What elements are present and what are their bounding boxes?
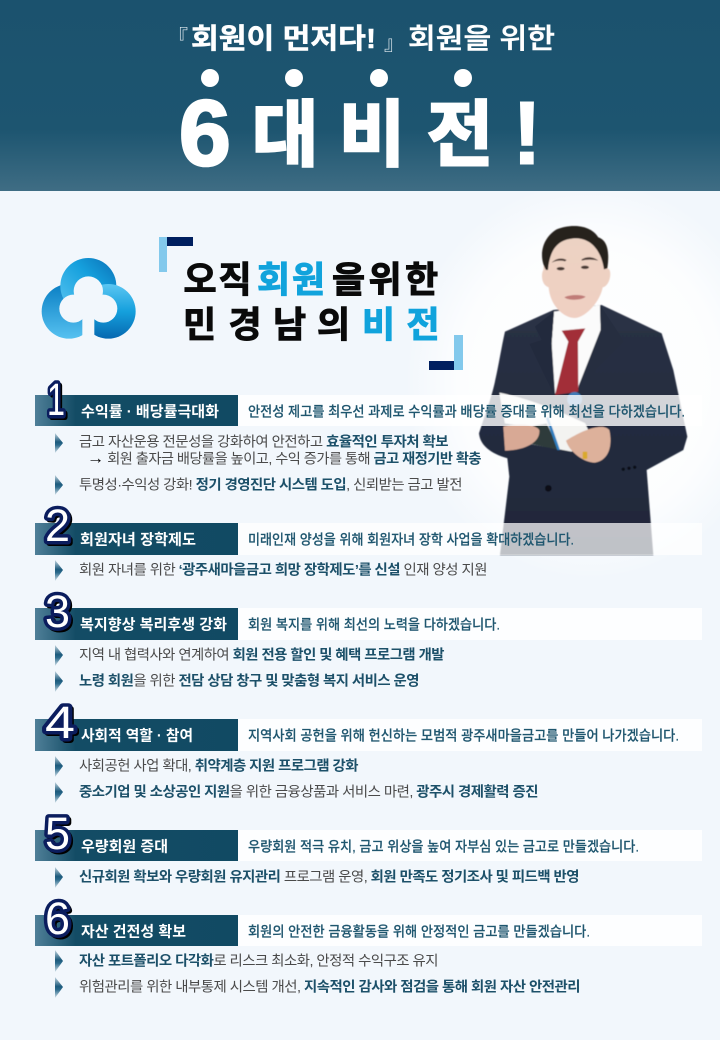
number 2: 2 bbox=[45, 500, 70, 551]
section 5 label: 우량회원 증대 bbox=[81, 838, 168, 856]
banner subtitle: 회원을 위한 bbox=[408, 23, 555, 54]
number 4: 4 bbox=[45, 697, 75, 748]
bullet icon bbox=[55, 756, 63, 777]
tie bbox=[555, 328, 585, 395]
section 3 bars bbox=[35, 608, 702, 640]
section 3 point 2: 노령 회원을 위한 전담 상담 창구 및 맞춤형 복지 서비스 운영 bbox=[79, 672, 419, 688]
banner title: 비 bbox=[339, 96, 405, 176]
section 5 bars bbox=[35, 830, 702, 861]
heading bracket bottom bbox=[429, 335, 463, 370]
section 4 bbox=[35, 697, 702, 803]
heading text: 오직 bbox=[184, 259, 252, 300]
section 2 statement: 미래인재 양성을 위해 회원자녀 장학 사업을 확대하겠습니다. bbox=[248, 532, 574, 548]
section 6 statement: 회원의 안전한 금융활동을 위해 안정적인 금고를 만들겠습니다. bbox=[248, 924, 590, 940]
section 4 point 2: 중소기업 및 소상공인 지원 을 위한 금융상품과 서비스 마련, 광주시 경제활력 증진 bbox=[79, 784, 538, 800]
heading bracket top bbox=[159, 237, 193, 272]
section 4 bars bbox=[35, 719, 702, 751]
section 5 statement: 우량회원 적극 유치, 금고 위상을 높여 자부심 있는 금고로 만들겠습니다. bbox=[248, 838, 639, 854]
banner title: 6 bbox=[179, 81, 231, 185]
bullet icon bbox=[55, 950, 63, 972]
vision heading bbox=[159, 237, 463, 370]
bullet icon bbox=[55, 560, 63, 581]
number 5: 5 bbox=[45, 808, 70, 859]
bullet icon bbox=[55, 977, 63, 998]
section 6 point 2: 위험관리를 위한 내부통제 시스템 개선, 지속적인 감사와 점검을 통해 회원 자산 안전관리 bbox=[79, 978, 580, 994]
number 3: 3 bbox=[45, 586, 70, 637]
section 2 bars bbox=[35, 523, 702, 555]
section 2 label: 회원자녀 장학제도 bbox=[80, 532, 196, 548]
section 3 bbox=[35, 586, 702, 692]
section 1 bbox=[35, 374, 702, 495]
section 1 point 1: 금고 자산운용 전문성을 강화하여 안전하고 효율적인 투자처 확보 bbox=[79, 434, 449, 450]
section 6 label: 자산 건전성 확보 bbox=[81, 924, 186, 940]
ring bbox=[583, 452, 587, 459]
section 4 point 1: 사회공헌 사업 확대, 취약계층 지원 프로그램 강화 bbox=[79, 758, 359, 774]
number 4: 4 bbox=[47, 699, 77, 750]
portrait glow bbox=[405, 180, 720, 580]
bullet icon bbox=[55, 867, 63, 888]
heading text: 을위한 bbox=[332, 259, 438, 300]
section 1 statement: 안전성 제고를 최우선 과제로 수익률과 배당률 증대를 위해 최선을 다하겠습니다. bbox=[248, 404, 685, 420]
section 4 statement: 지역사회 공헌을 위해 헌신하는 모범적 광주새마을금고를 만들어 나가겠습니다. bbox=[248, 728, 679, 744]
bullet icon bbox=[55, 782, 63, 803]
sleeve buttons and jacket button bbox=[545, 466, 636, 492]
banner title: ! bbox=[512, 84, 542, 184]
heading text: 회원 bbox=[257, 259, 325, 300]
bullet icon bbox=[55, 433, 63, 453]
lapels bbox=[529, 312, 554, 393]
banner subtitle: 『 bbox=[168, 26, 188, 49]
shirt bbox=[552, 305, 601, 393]
section 6 bbox=[35, 893, 702, 998]
neck and face bbox=[542, 238, 610, 318]
section 1 point 2: 투명성·수익성 강화! 정기 경영진단 시스템 도입 , 신뢰받는 금고 발전 bbox=[79, 476, 462, 492]
section 3 statement: 회원 복지를 위해 최선의 노력을 다하겠습니다. bbox=[248, 616, 500, 632]
lapel pin bbox=[567, 392, 582, 407]
hair bbox=[542, 226, 608, 270]
section 5 point 1: 신규회원 확보와 우량회원 유지관리 프로그램 운영, 회원 만족도 정기조사 및 피드백 반영 bbox=[79, 868, 579, 884]
section 4 label: 사회적 역할 · 참여 bbox=[81, 728, 193, 744]
banner subtitle bbox=[168, 23, 555, 55]
number 6: 6 bbox=[47, 895, 72, 946]
section 3 label: 복지향상 복리후생 강화 bbox=[80, 616, 227, 634]
banner subtitle: 』 bbox=[384, 33, 404, 55]
portrait of man in suit holding a booklet bbox=[479, 226, 687, 555]
banner subtitle: 회원이 먼저다! bbox=[191, 23, 376, 54]
section 6 point 1: 자산 포트폴리오 다각화 로 리스크 최소화, 안정적 수익구조 유지 bbox=[79, 952, 438, 968]
number 1: 1 bbox=[47, 374, 65, 425]
banner title: 전 bbox=[427, 96, 493, 176]
section 1 point 1 detail: → 회원 출자금 배당률을 높이고, 수익 증가를 통해 금고 재정기반 확충 bbox=[87, 448, 482, 468]
section 2 point 1: 회원 자녀를 위한 ‘광주새마을금고 희망 장학제도’를 신설 인재 양성 지원 bbox=[79, 562, 487, 578]
header banner bbox=[0, 0, 720, 191]
heading text: 민경남의 bbox=[183, 304, 350, 345]
bullet icon bbox=[55, 475, 63, 495]
eyebrows, eyes, mouth bbox=[552, 257, 598, 270]
number 1: 1 bbox=[49, 376, 67, 427]
logo: clover cloud bbox=[42, 258, 136, 340]
section 2 bbox=[35, 500, 702, 581]
heading text bbox=[183, 259, 440, 345]
number 6: 6 bbox=[45, 893, 70, 944]
number 2: 2 bbox=[47, 502, 72, 553]
emphasis dots bbox=[201, 69, 472, 87]
bullet icon bbox=[55, 645, 63, 666]
hands bbox=[503, 424, 539, 451]
banner title: 대 bbox=[252, 96, 318, 176]
booklet bbox=[499, 393, 592, 452]
section 1 label: 수익률 · 배당률극대화 bbox=[81, 404, 219, 420]
number 3: 3 bbox=[47, 588, 72, 639]
bullet icon bbox=[55, 671, 63, 692]
section 1 bars bbox=[35, 395, 702, 426]
section 5 bbox=[35, 808, 702, 888]
banner title bbox=[179, 81, 542, 185]
section 6 bars bbox=[35, 915, 702, 946]
number 5: 5 bbox=[47, 810, 72, 861]
heading text: 비전 bbox=[362, 304, 440, 345]
section 3 point 1: 지역 내 협력사와 연계하여 회원 전용 할인 및 혜택 프로그램 개발 bbox=[79, 646, 445, 662]
